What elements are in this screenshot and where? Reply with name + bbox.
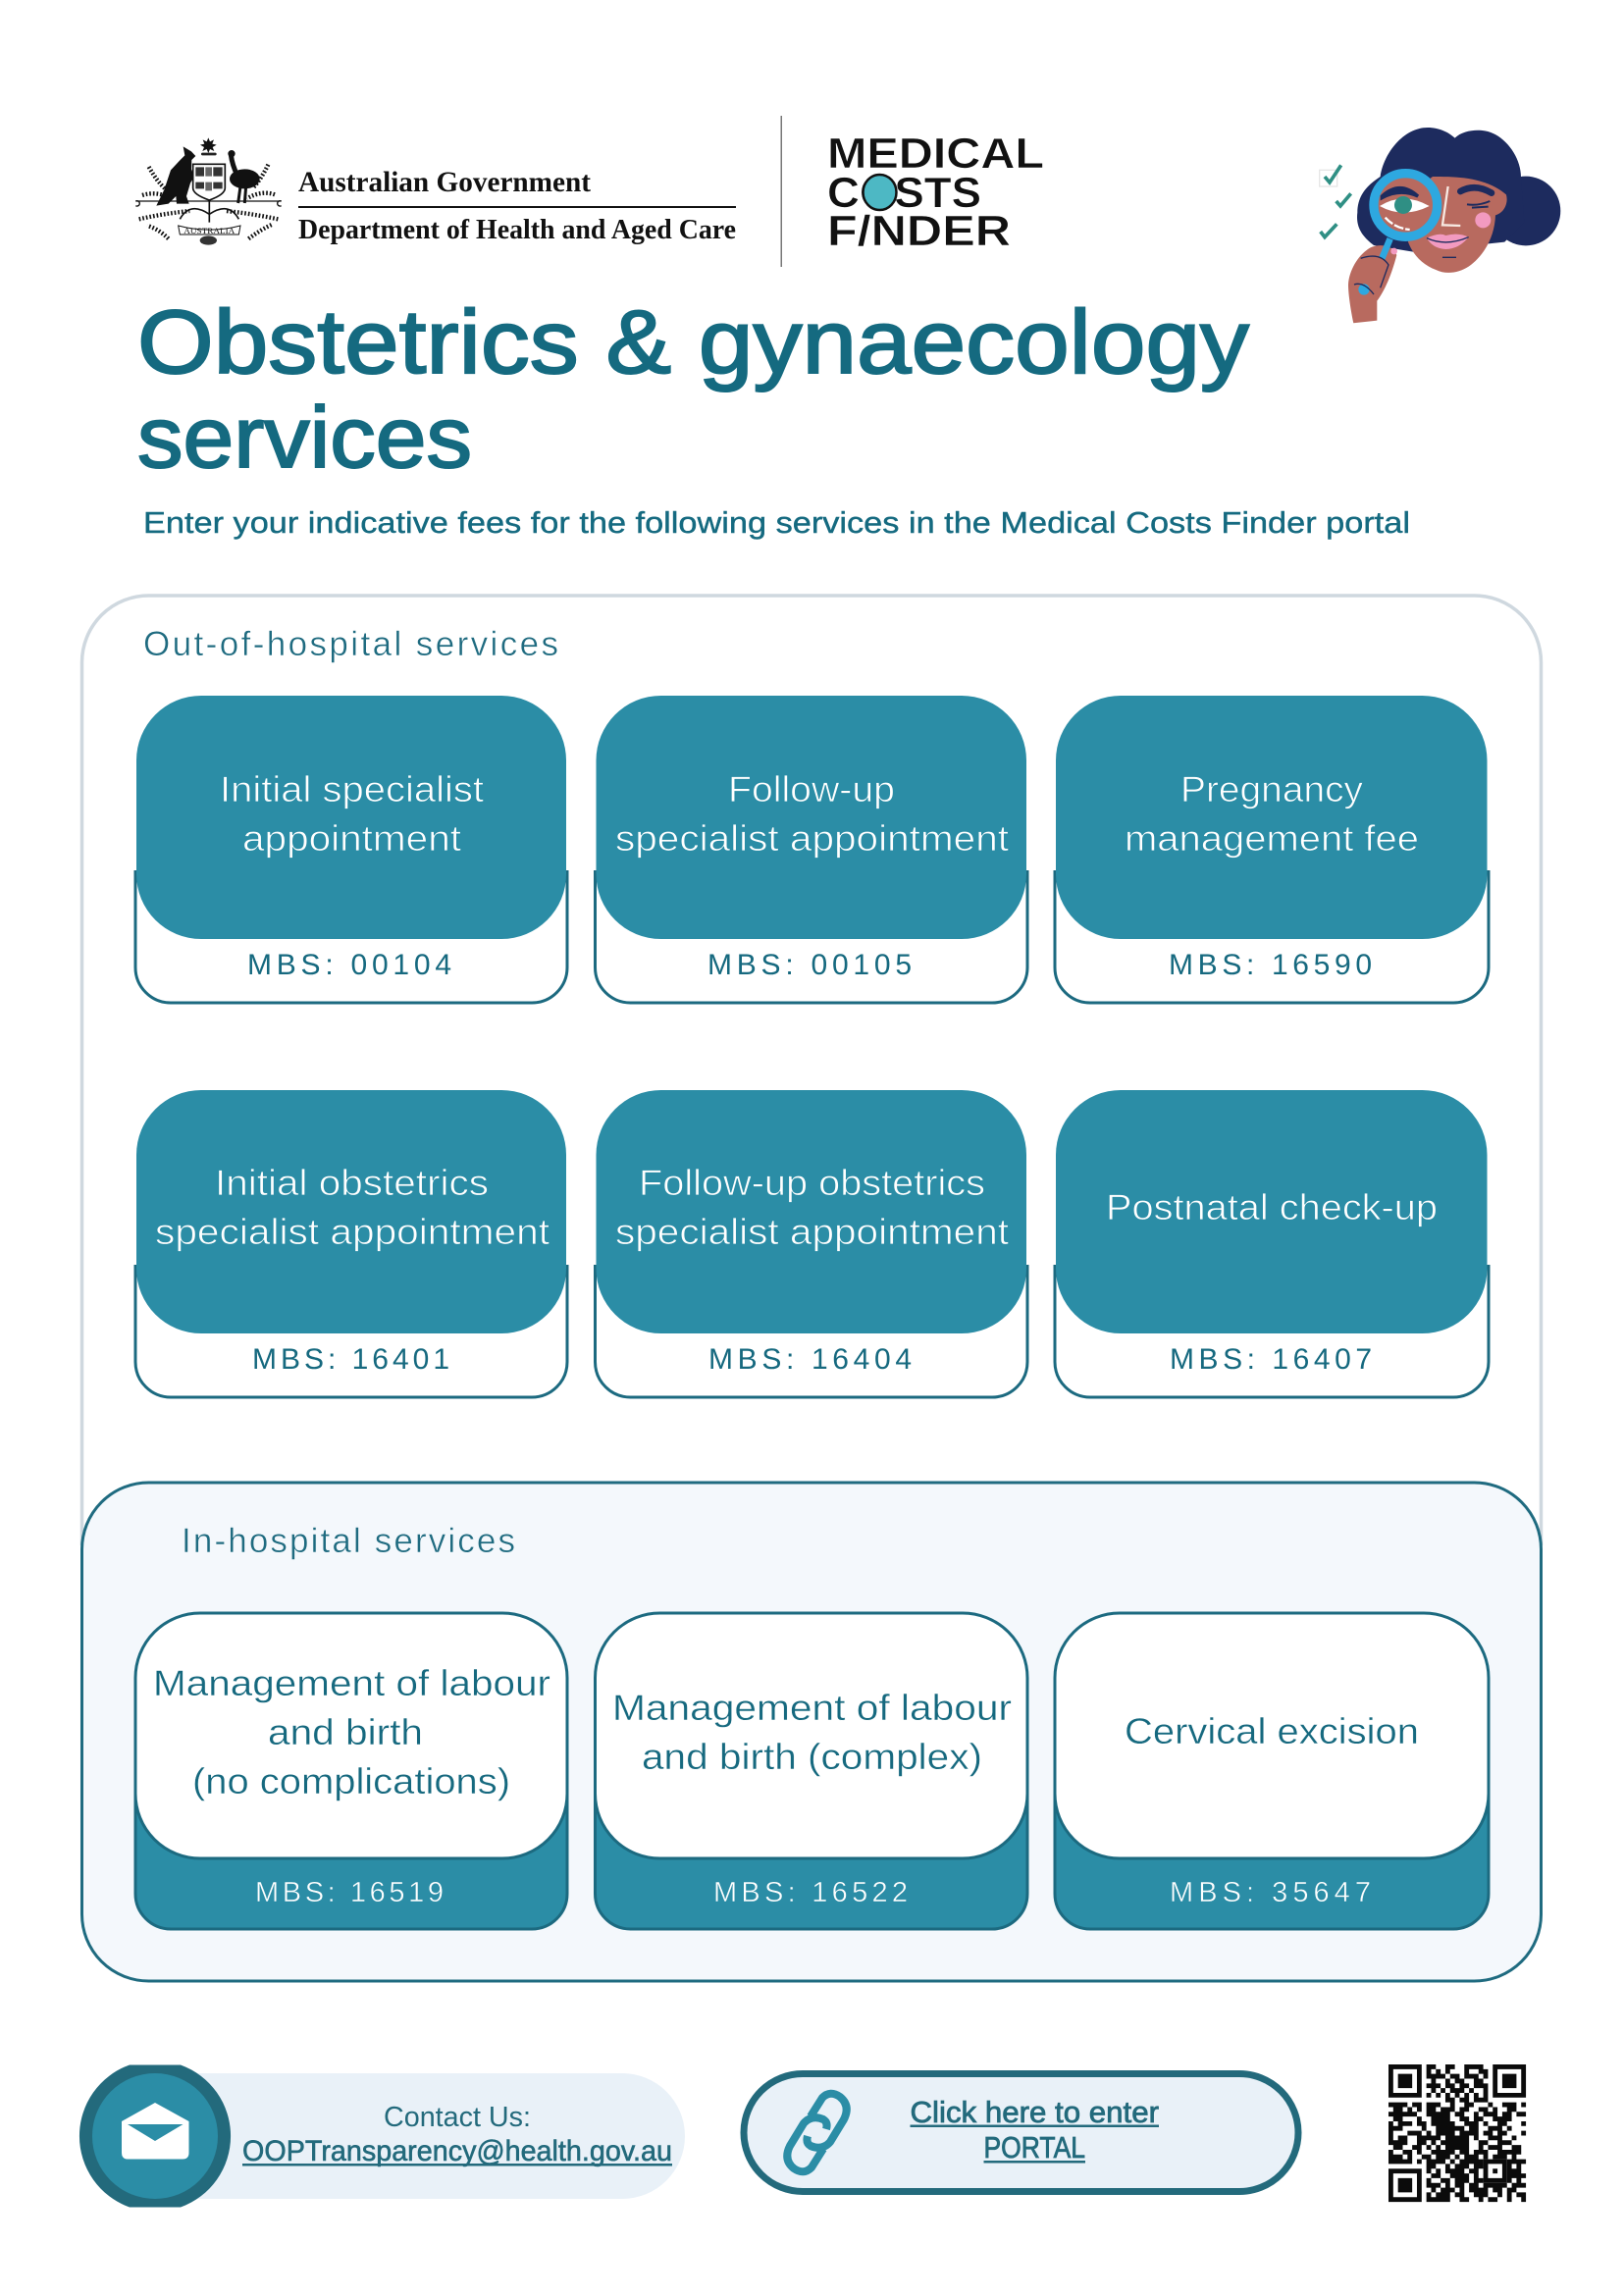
card: initial obstetrics [135,1090,567,1397]
contact pill [79,2064,685,2208]
card: follow-up specialist: Follow-up [728,769,895,809]
card: postnatal check-up [1055,1090,1489,1397]
card: postnatal check-up: Postnatal check-up [1106,1187,1438,1227]
Medical Costs Finder logo: MEDICAL [827,130,1044,178]
illustration: woman with magnifying glass and checklist [1320,128,1560,323]
card: cervical excision: MBS: 35647 [1170,1877,1371,1908]
panel: in-hospital services [82,1483,1541,1981]
icon: coat of arms: AUSTRALIA [183,227,236,235]
Australian Government crest logo [135,137,736,245]
card: labour and birth, complex: and birth (complex) [642,1737,982,1777]
card: labour and birth, no complications: Management of labour [153,1663,550,1703]
title: Obstetrics & gynaecology [137,292,1249,392]
card: labour and birth, no complications: (no complications) [192,1761,510,1801]
card: cervical excision: Cervical excision [1125,1711,1419,1751]
card: labour and birth, complex: Management of labour [612,1688,1012,1728]
card: cervical excision [1055,1613,1489,1929]
heading: department: Department of Health and Aged Care [298,215,736,245]
Medical Costs Finder logo: F/NDER [827,207,1011,255]
panel: out-of-hospital services [82,596,1541,1545]
card: follow-up obstetrics: Follow-up obstetrics [639,1163,985,1203]
card: labour and birth, complex [595,1613,1027,1929]
heading: in-hospital: In-hospital services [182,1522,515,1560]
icon: chain link [787,2094,847,2171]
card: initial obstetrics: specialist appointment [155,1212,550,1252]
card: labour and birth, no complications: and birth [268,1712,423,1752]
card: follow-up obstetrics: MBS: 16404 [708,1343,912,1376]
contact label: Contact Us: [384,2102,531,2133]
card: initial obstetrics: Initial obstetrics [215,1163,489,1203]
portal button [744,2074,1298,2192]
card: labour and birth, no complications: MBS: 16519 [255,1877,444,1908]
heading: Australian Government: Australian Government [298,166,591,198]
divider between logos [781,116,782,267]
portal link text: PORTAL [983,2130,1085,2165]
card: labour and birth, no complications [135,1613,567,1929]
Medical Costs Finder logo: COSTS [827,169,981,217]
portal link text: Click here to enter [911,2095,1159,2129]
card: initial specialist [135,696,567,1003]
card: follow-up specialist [595,696,1027,1003]
icon: teal lens in the O [864,175,897,210]
card: initial specialist: Initial specialist [220,769,485,809]
card: pregnancy management fee: MBS: 16590 [1169,949,1372,981]
card: follow-up obstetrics: specialist appointment [615,1212,1010,1252]
card: initial obstetrics: MBS: 16401 [252,1343,449,1376]
card: follow-up specialist: MBS: 00105 [707,949,912,981]
card: pregnancy management fee: Pregnancy [1180,769,1364,809]
card: follow-up obstetrics [595,1090,1027,1397]
contact email: OOPTransparency@health.gov.au [242,2135,672,2167]
card: follow-up specialist: specialist appointment [615,818,1010,859]
title [137,292,1249,486]
QR code [1388,2064,1526,2202]
card: postnatal check-up: MBS: 16407 [1170,1343,1372,1376]
heading: out-of-hospital: Out-of-hospital services [143,625,558,663]
subtitle: Enter your indicative fees for the following services in the Medical Costs Finder portal [143,505,1410,540]
card: labour and birth, complex: MBS: 16522 [713,1877,908,1908]
icon: envelope in circle [79,2064,231,2208]
card: initial specialist: MBS: 00104 [247,949,451,981]
card: pregnancy management fee: management fee [1125,818,1419,859]
rule [298,206,736,208]
Medical Costs Finder logo [827,130,1044,255]
title: services [137,389,472,486]
card: pregnancy management fee [1055,696,1489,1003]
icon: coat of arms [135,137,282,245]
portal link text [911,2095,1159,2165]
card: initial specialist: appointment [242,818,462,859]
